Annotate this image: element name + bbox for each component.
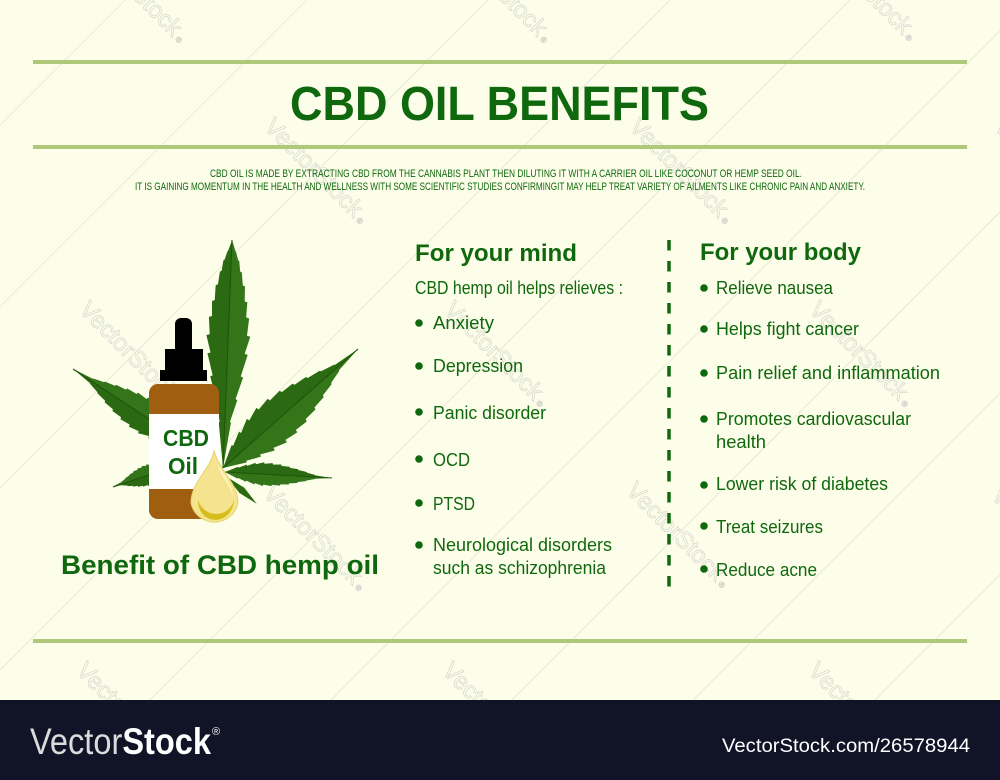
icon: dropper bottle — [149, 318, 219, 519]
heading: for your body: For your body — [700, 239, 862, 266]
footer bar: ® — [212, 726, 220, 738]
bullet list: body: Promotes cardiovascular — [716, 409, 911, 429]
intro line: CBD hemp oil helps relieves : — [415, 278, 623, 298]
bullet list: mind: Panic disorder — [433, 403, 546, 423]
bullet list: mind: Depression — [433, 356, 523, 376]
infographic canvas: VectorStock® — [259, 113, 375, 229]
caption: Benefit of CBD hemp oil — [61, 550, 379, 580]
infographic canvas: VectorStock® — [804, 296, 920, 412]
panel: for your body — [700, 239, 940, 580]
intro text: CBD OIL IS MADE BY EXTRACTING CBD FROM THE CANNABIS PLANT THEN DILUTING IT WITH A CARRIER OIL LIKE COCONUT OR HEMP SEED OIL. — [210, 168, 802, 180]
bullet list: mind: Anxiety — [433, 313, 494, 333]
icon: dropper bottle: Oil — [168, 453, 198, 479]
infographic canvas: VectorStock® — [258, 480, 374, 596]
intro text — [135, 168, 865, 193]
icon: dropper bottle: CBD — [163, 425, 209, 451]
panel: for your mind — [415, 240, 623, 578]
bullet list: body: Reduce acne — [716, 560, 817, 580]
icon: oil drop — [191, 450, 238, 522]
icon: cannabis leaf — [63, 239, 373, 506]
infographic canvas: VectorStock® — [74, 296, 190, 412]
bullet list: mind — [415, 313, 612, 578]
bullet list: body: health — [716, 432, 766, 452]
infographic canvas: VectorStock® — [624, 113, 740, 229]
infographic canvas: VectorStock® — [71, 657, 187, 773]
dashed divider — [667, 240, 671, 587]
footer bar — [0, 700, 1000, 780]
infographic canvas: VectorStock® — [621, 477, 737, 593]
bullet list: body: Relieve nausea — [716, 278, 834, 298]
bullet list: mind: Neurological disorders — [433, 535, 612, 555]
title: CBD OIL BENEFITS — [290, 78, 709, 131]
footer logo: VectorStock — [30, 721, 211, 762]
bullet list: body: Pain relief and inflammation — [716, 363, 940, 383]
infographic canvas: VectorStock® — [803, 657, 919, 773]
heading: for your mind: For your mind — [415, 240, 577, 267]
infographic canvas: VectorStock® — [437, 657, 553, 773]
footer url: VectorStock.com/26578944 — [722, 736, 970, 757]
bullet list: mind: OCD — [433, 450, 470, 470]
bullet list: mind: PTSD — [433, 494, 475, 514]
bullet list: mind: such as schizophrenia — [433, 558, 607, 578]
bullet list: body: Treat seizures — [716, 517, 823, 537]
bullet list: body: Lower risk of diabetes — [716, 474, 888, 494]
bullet list: body: Helps fight cancer — [716, 319, 859, 339]
illustration: cannabis leaf with CBD oil bottle — [63, 239, 373, 522]
infographic canvas: VectorStock® — [439, 296, 555, 412]
bullet list: body — [700, 278, 940, 580]
